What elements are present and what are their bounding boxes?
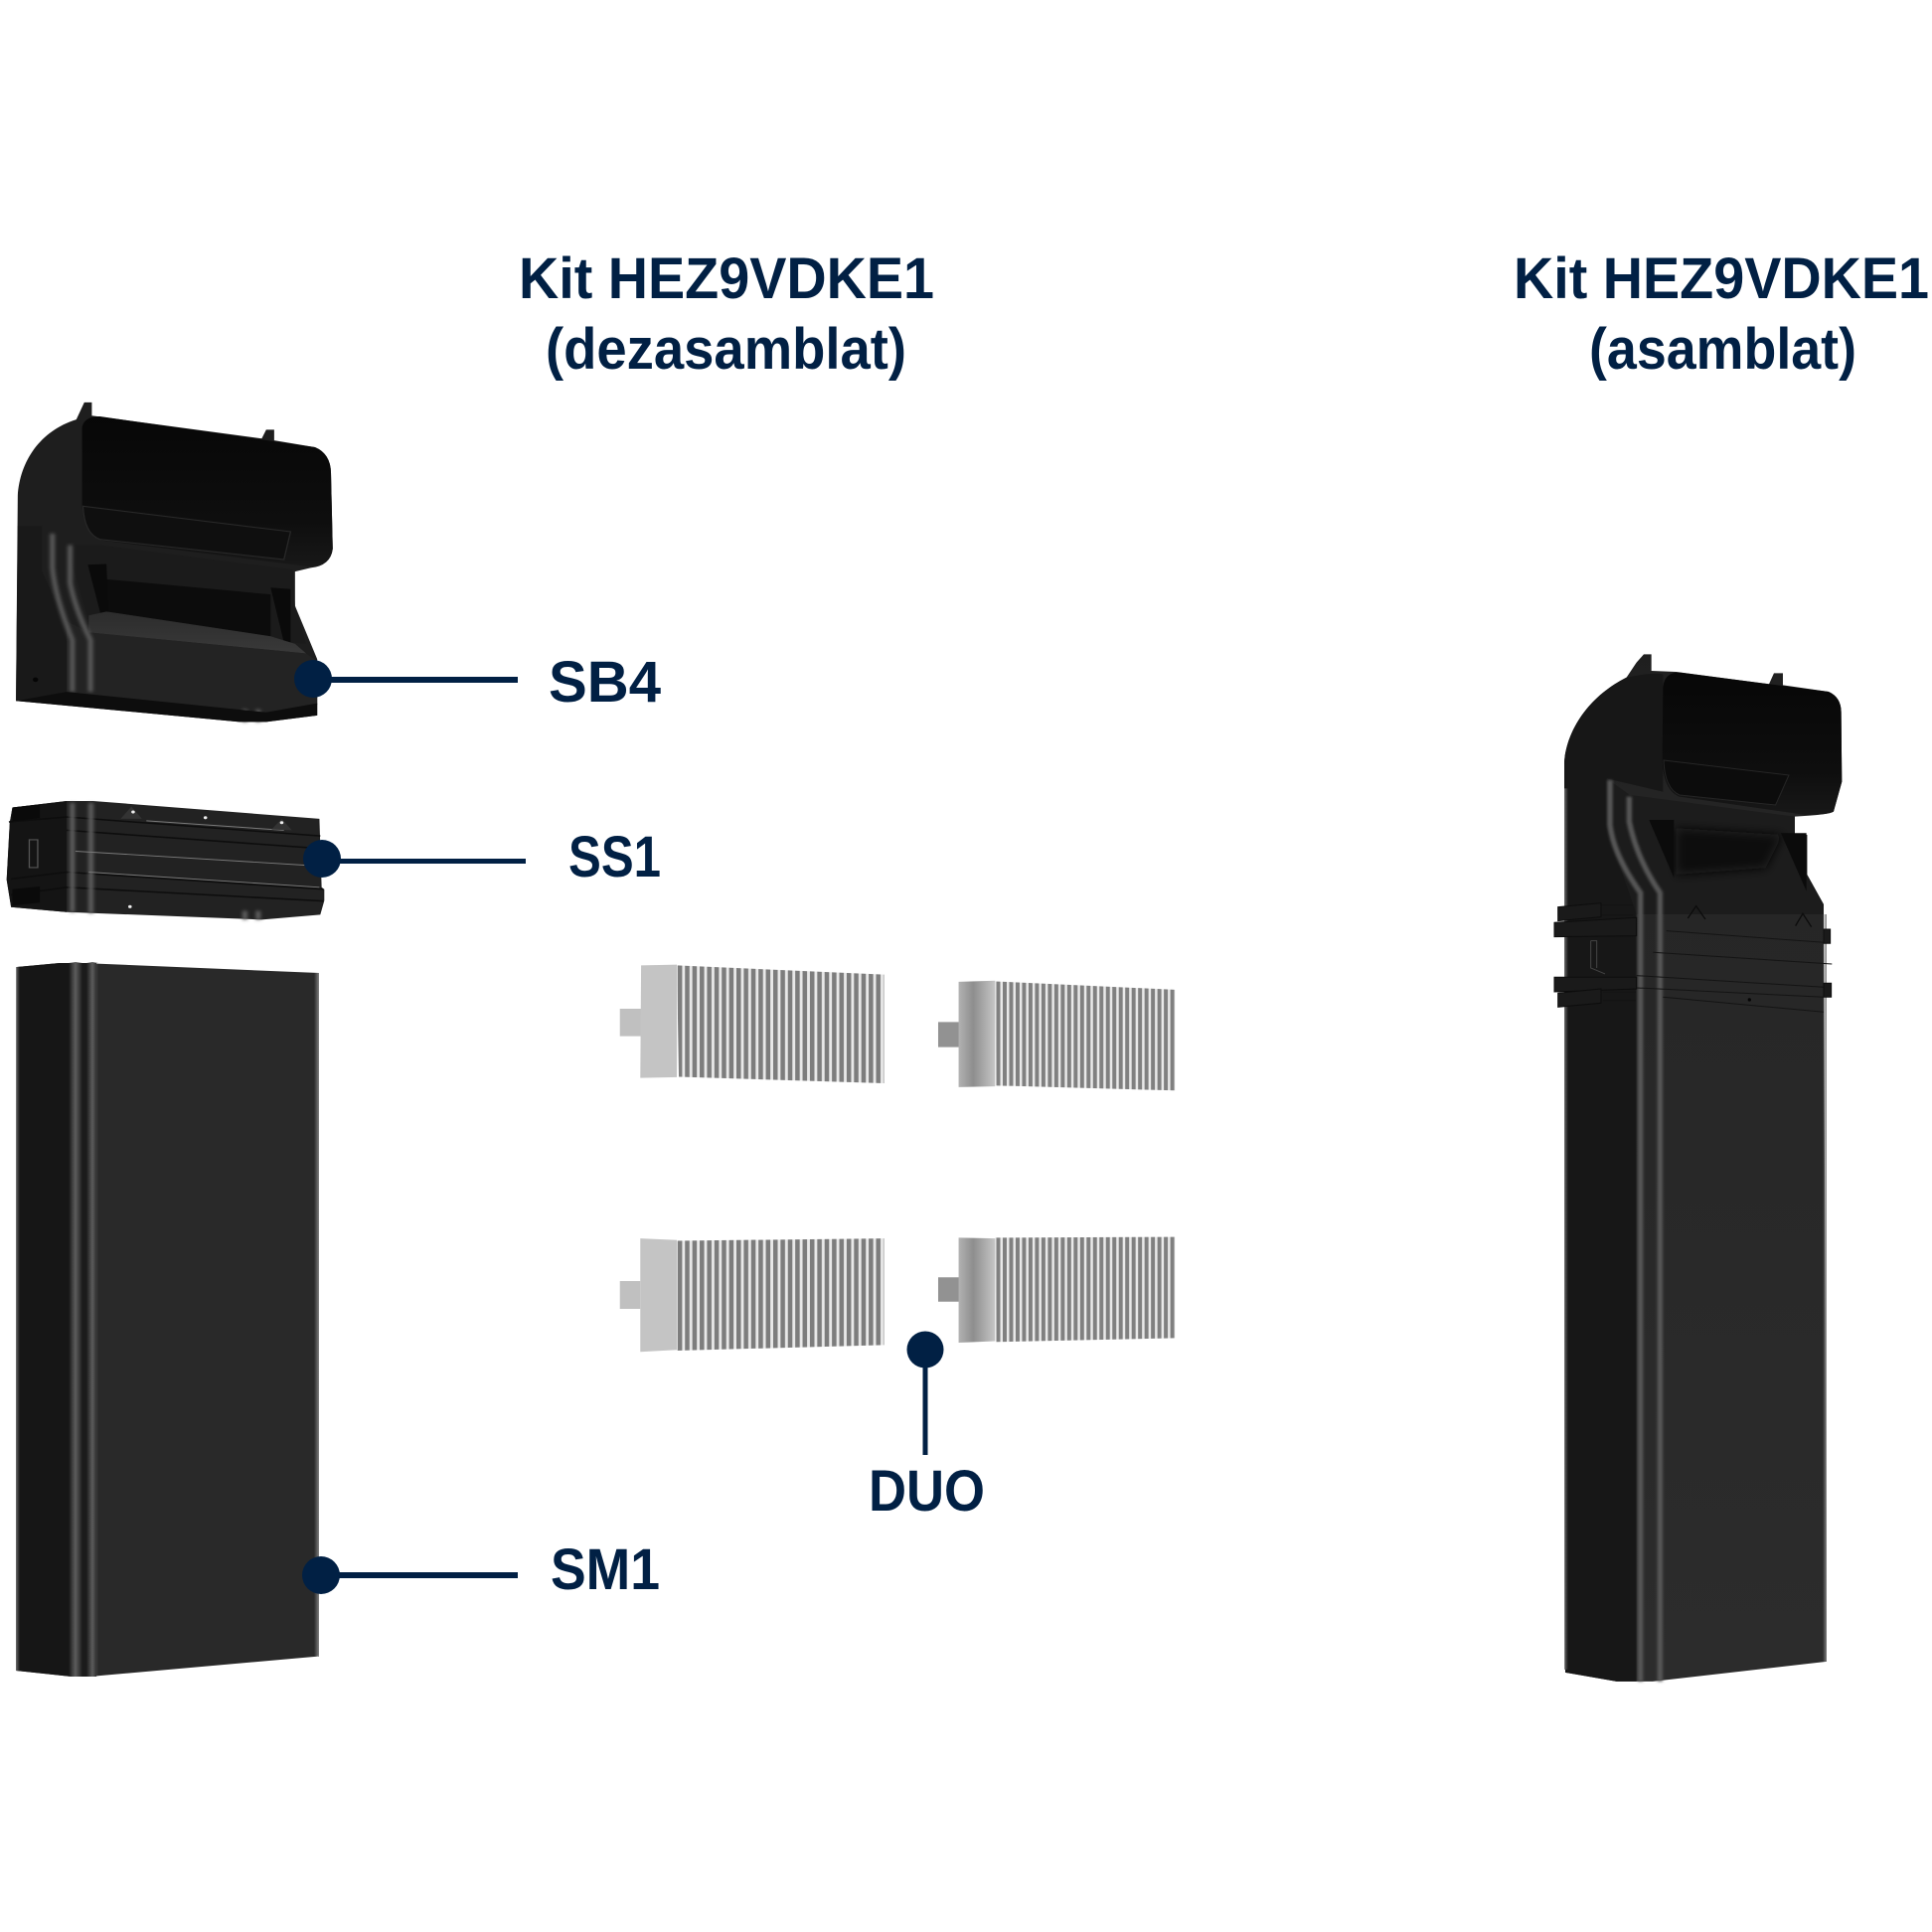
assembled opening: [1663, 673, 1842, 815]
callout SS1: [303, 825, 661, 889]
part SM1: straight duct: [16, 962, 319, 1677]
callout SS1: SS1: [568, 825, 661, 889]
callout SM1: [302, 1537, 660, 1602]
part SS1: coupling sleeve: [7, 801, 324, 919]
filter top right: [938, 981, 1175, 1090]
assembled kit: [1554, 654, 1842, 1682]
assembled clips: [1554, 903, 1832, 1007]
assembled neck: [1607, 778, 1824, 914]
callout DUO: [869, 1332, 985, 1524]
title: assembled kit: (asamblat): [1589, 317, 1856, 382]
filter bottom left: [620, 1238, 884, 1352]
filter bottom right: [938, 1237, 1175, 1343]
title: disassembled kit: [519, 246, 934, 382]
part SB4: elbow outlet: [16, 402, 333, 722]
elbow opening: [82, 416, 333, 566]
title: disassembled kit: Kit HEZ9VDKE1: [519, 246, 934, 311]
lower collar: [88, 611, 306, 653]
screw holes: [128, 811, 283, 908]
filter top left: [620, 965, 884, 1083]
callout SM1: SM1: [551, 1537, 660, 1602]
callout DUO: DUO: [869, 1459, 985, 1524]
callout SB4: SB4: [549, 650, 661, 715]
duo filters: [620, 965, 1175, 1352]
infographic canvas: [6, 256, 1928, 1684]
title: assembled kit: [1514, 246, 1929, 382]
title: disassembled kit: (dezasamblat): [546, 317, 906, 382]
recess under opening: [67, 545, 306, 644]
callout SB4: [294, 650, 661, 715]
